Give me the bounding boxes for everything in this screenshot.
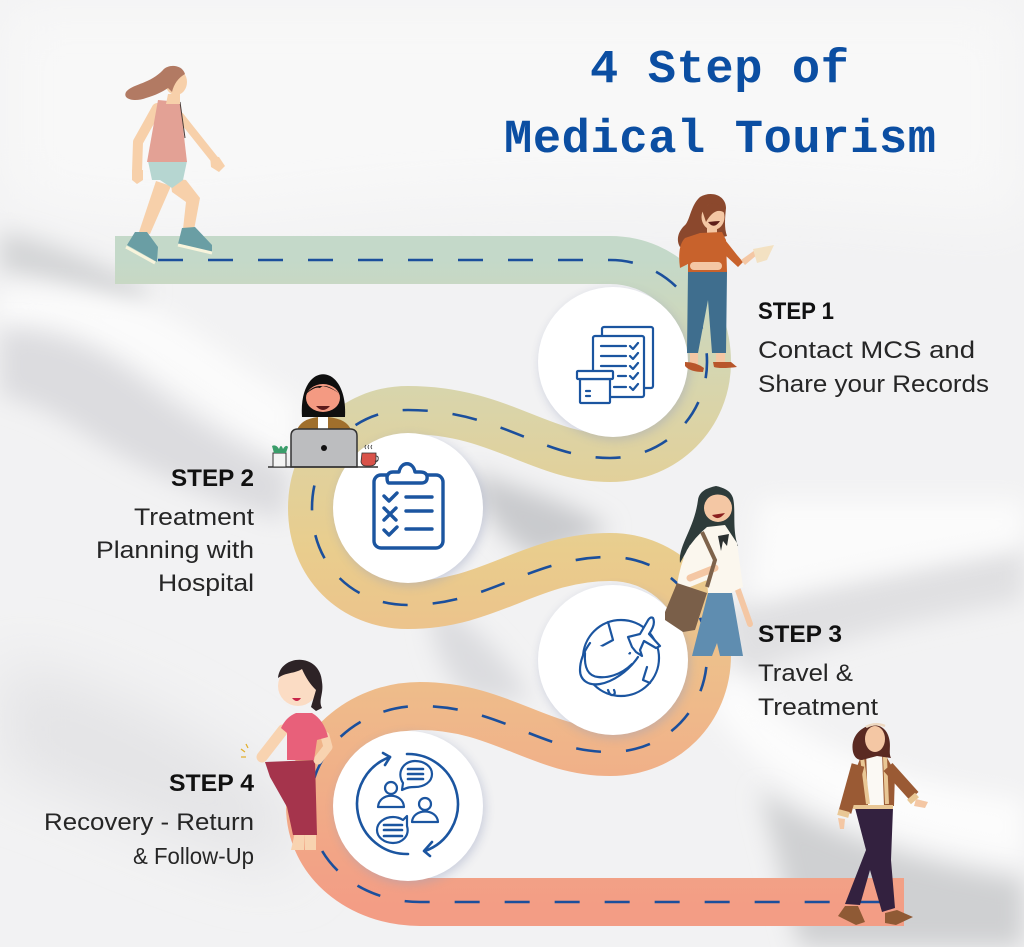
text: step 3: Travel & (758, 660, 853, 687)
figure: woman with laptop (268, 374, 378, 467)
figure: woman in oversized trousers (241, 660, 328, 850)
text: step 3 (758, 621, 878, 721)
icon: patient follow-up conversation (357, 753, 458, 856)
title: 4 Step of (590, 44, 849, 97)
text: step 3: Treatment (758, 694, 878, 721)
white circle: step 4 (333, 731, 483, 881)
figure: woman in brown jacket (838, 724, 928, 925)
figure: woman with paper (678, 194, 774, 372)
text: step 2 (96, 465, 254, 597)
title: Medical Tourism (504, 114, 936, 167)
text: step 3: STEP 3 (758, 621, 842, 648)
figure: walking woman in pink top (125, 66, 225, 263)
icon: clipboard checklist (374, 464, 443, 548)
white circle: step 1 (538, 287, 688, 437)
text: step 2: Planning with (96, 537, 254, 564)
text: step 4: STEP 4 (169, 770, 255, 797)
text: step 2: Hospital (158, 570, 254, 597)
text: step 4 (44, 770, 255, 869)
text: step 1: Contact MCS and (758, 337, 975, 364)
text: step 2: STEP 2 (171, 465, 254, 492)
text: step 2: Treatment (134, 504, 254, 531)
text: step 1 (758, 298, 989, 398)
figure: woman with shoulder bag (665, 486, 750, 656)
white circle: step 3 (538, 585, 688, 735)
text: step 4: Recovery - Return (44, 809, 254, 836)
text: step 1: STEP 1 (758, 298, 834, 325)
text: step 4: & Follow-Up (133, 843, 254, 869)
winding road (115, 260, 904, 902)
icon: documents and box (577, 327, 653, 403)
text: step 1: Share your Records (758, 371, 989, 398)
icon: globe and airplane (580, 618, 660, 696)
white circle: step 2 (333, 433, 483, 583)
title (504, 44, 936, 167)
